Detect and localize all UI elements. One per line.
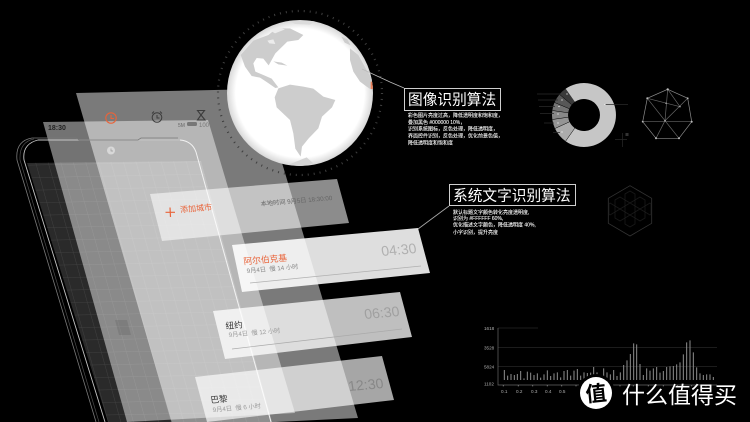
date and offset: 9月4日 慢 6 小时 bbox=[212, 402, 261, 414]
leader line: system text recognition bbox=[418, 206, 449, 229]
highlighted coast bbox=[371, 82, 373, 89]
axis labels: 0.2 bbox=[516, 389, 523, 394]
watermark text: 什么值得买 bbox=[622, 382, 737, 408]
text block: system text notes bbox=[453, 209, 536, 236]
card: Albuquerque bbox=[232, 228, 430, 292]
icon: plus bbox=[166, 208, 175, 217]
watermark logo bbox=[577, 374, 615, 412]
dark mark on screen bbox=[115, 320, 131, 335]
icon: orange clock tab bbox=[106, 113, 116, 123]
heading box: image recognition bbox=[404, 88, 500, 110]
bars bbox=[503, 340, 713, 386]
bar chart bbox=[484, 326, 717, 394]
axis labels: 0.1 bbox=[501, 389, 508, 394]
Arctic islands bbox=[267, 27, 285, 44]
South America bbox=[275, 85, 335, 157]
phone screen with grid bbox=[27, 161, 272, 422]
axis labels: 1618 bbox=[484, 326, 495, 331]
status bar: 18:30 bbox=[48, 125, 66, 132]
date and offset: 9月4日 慢 12 小时 bbox=[228, 327, 281, 339]
leader line: image recognition bbox=[362, 69, 404, 88]
text block: image recognition notes bbox=[408, 112, 503, 146]
icon: alarm clock tab bbox=[152, 112, 162, 122]
heading box: system text recognition: 系统文字识别算法 bbox=[453, 188, 571, 204]
text block: image recognition notes: 彩色图片亮度过高，降低透明度和饱和度， bbox=[408, 112, 503, 119]
axis labels: 3528 bbox=[484, 346, 495, 350]
text block: system text notes: 小字识别，提升亮度 bbox=[453, 229, 498, 236]
donut chart bbox=[537, 83, 628, 147]
city name: 纽约 bbox=[225, 319, 243, 331]
North America bbox=[241, 28, 303, 88]
city name: 巴黎 bbox=[210, 393, 229, 405]
axis labels: 5824 bbox=[484, 364, 495, 370]
text block: image recognition notes: 叠加黑色 #000000 10%， bbox=[408, 119, 465, 126]
Africa and Europe edge bbox=[350, 48, 373, 91]
card: New York bbox=[213, 292, 412, 359]
card: Paris bbox=[195, 356, 394, 422]
watermark logo: 值 bbox=[585, 382, 608, 407]
globe tick ring bbox=[218, 11, 382, 175]
text block: image recognition notes: 降低透明度和饱和度 bbox=[408, 140, 453, 146]
add city label: 添加城市 bbox=[179, 202, 213, 214]
hexagon honeycomb bbox=[608, 186, 652, 236]
text block: system text notes: 默认标题文字颜色转化亮度透明度, bbox=[453, 209, 529, 216]
icon: hourglass tab bbox=[198, 110, 205, 120]
Iceland and Britain bbox=[341, 37, 351, 45]
axis labels: 0.3 bbox=[531, 389, 538, 394]
globe bbox=[227, 20, 373, 167]
text block: system text notes: 优化描述文字颜色，降低透明度 40%, bbox=[453, 222, 536, 228]
axis labels bbox=[484, 326, 566, 394]
text block: image recognition notes: 界面控件识别，反色处理，优化前景色值， bbox=[408, 132, 503, 140]
radar network chart bbox=[642, 88, 693, 139]
heading box: image recognition: 图像识别算法 bbox=[408, 92, 496, 108]
axis labels: 0.5 bbox=[559, 389, 566, 394]
local time label: 本地时间 9月5日 18:30:00 bbox=[260, 194, 333, 208]
time: 06:30 bbox=[363, 303, 401, 322]
Greenland bbox=[288, 21, 317, 25]
status bar: 100 bbox=[199, 123, 210, 129]
Caribbean bbox=[274, 62, 287, 66]
status bar: 5M bbox=[178, 123, 185, 129]
small legend bbox=[615, 133, 628, 147]
date and offset: 9月4日 慢 14 小时 bbox=[246, 263, 299, 275]
text block: system text notes: 识别为 #FFFFFF 60%, bbox=[453, 215, 503, 222]
card: add city bbox=[150, 179, 349, 241]
time: 12:30 bbox=[347, 375, 385, 394]
icon: small clock in phone bbox=[107, 146, 115, 154]
back translucent panel bbox=[76, 89, 358, 422]
axis labels: 1102 bbox=[484, 382, 494, 386]
status bar bbox=[48, 122, 210, 132]
time: 04:30 bbox=[380, 240, 418, 259]
city name: 阿尔伯克基 bbox=[243, 252, 288, 266]
text block: image recognition notes: 识别系统图标，反色处理，降低透明度， bbox=[408, 126, 498, 132]
axis labels: 0.4 bbox=[545, 389, 552, 394]
front translucent panel bbox=[43, 120, 295, 422]
phone outline bbox=[17, 138, 271, 422]
Antarctic tip bbox=[290, 158, 313, 166]
